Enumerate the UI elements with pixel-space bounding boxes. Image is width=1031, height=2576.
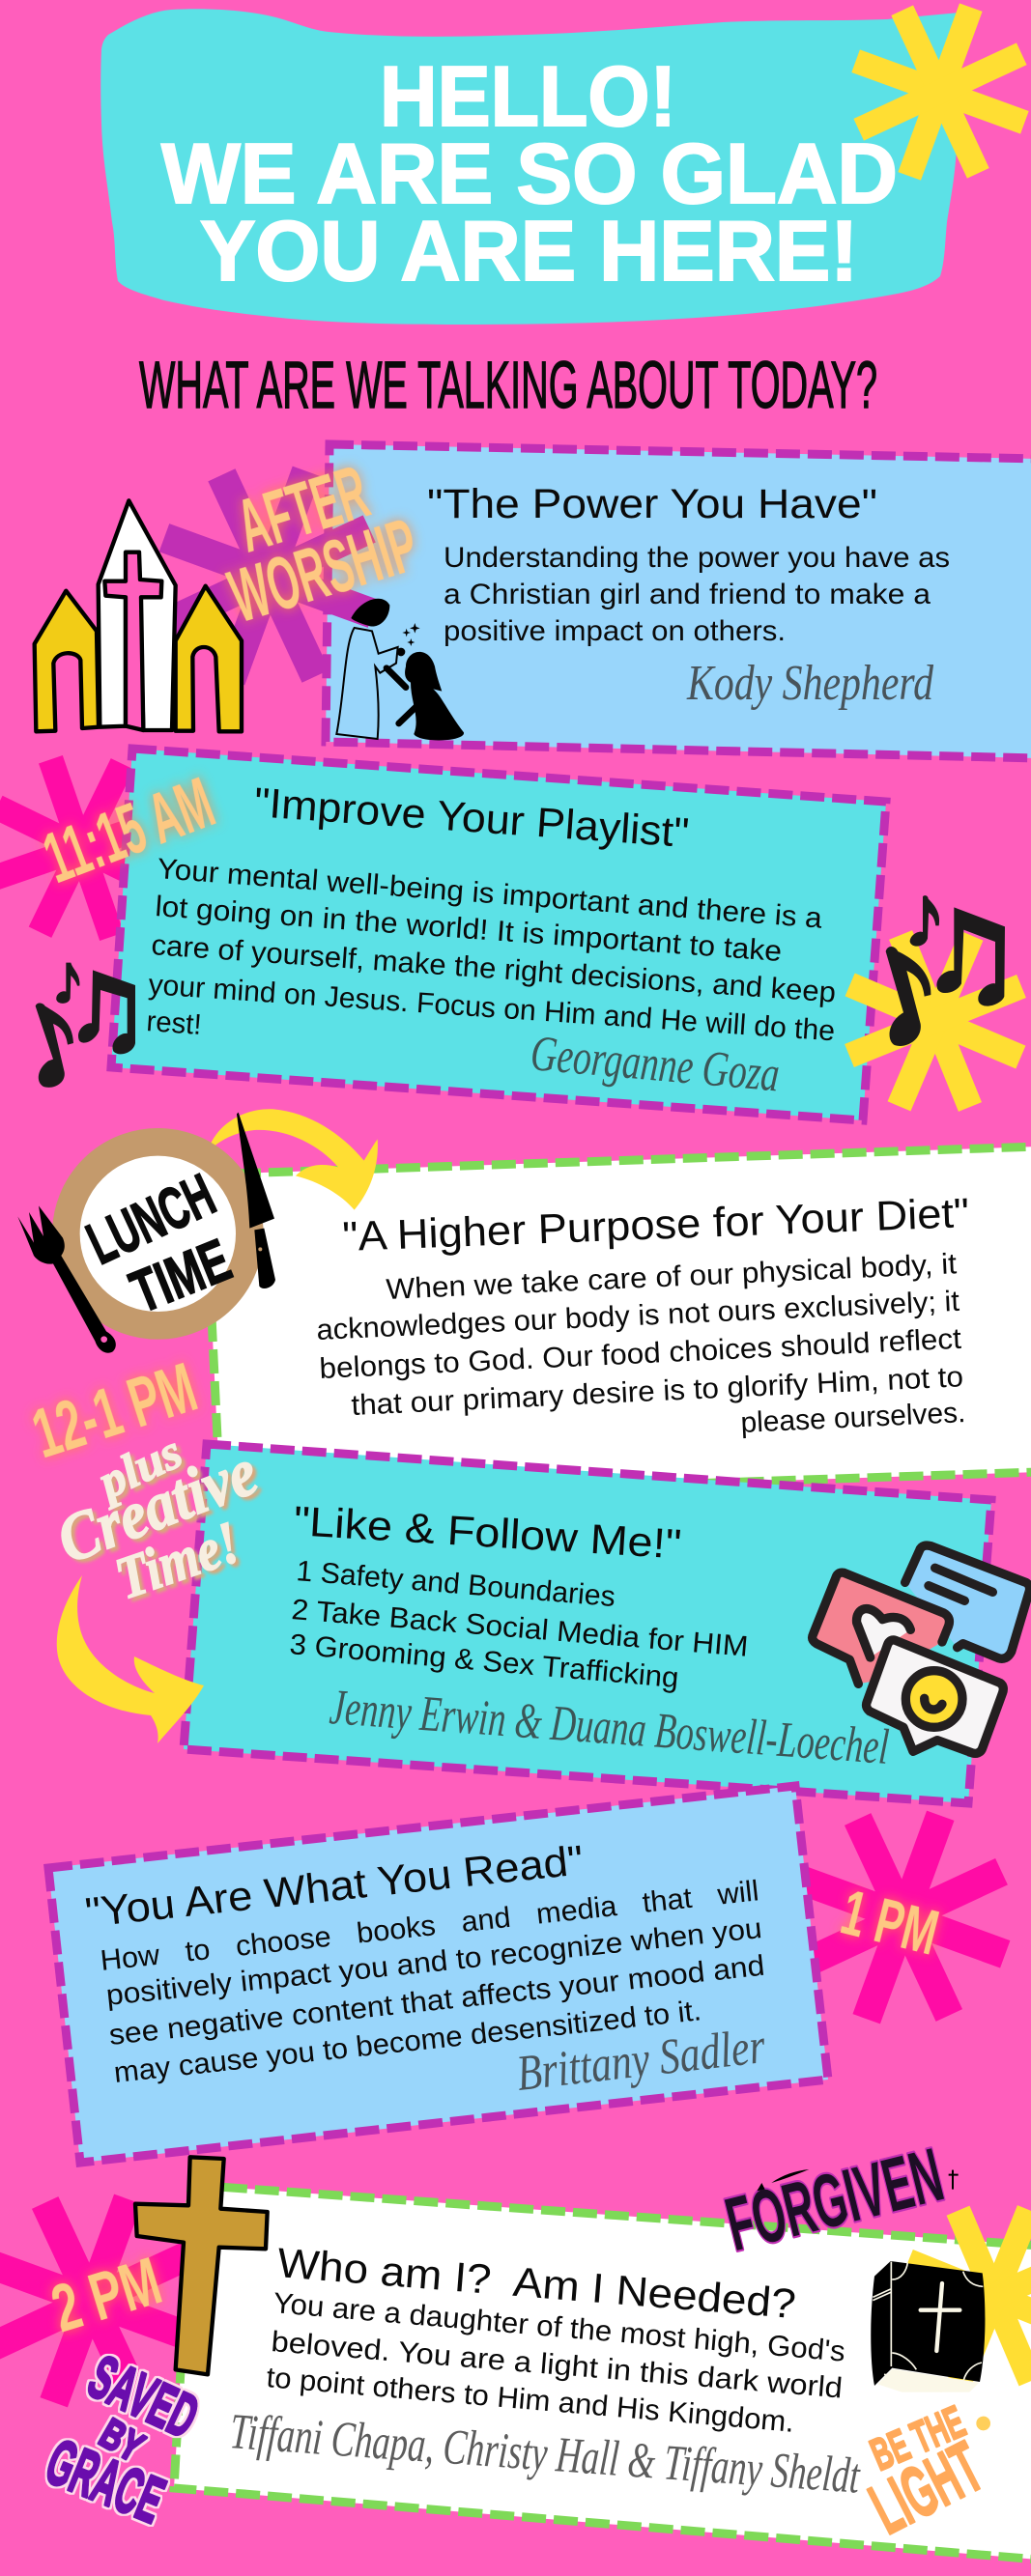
saved: SAVED xyxy=(78,2343,208,2451)
panel body: may cause you to become desensitized to it. xyxy=(112,1995,702,2089)
panel body: beloved. You are a light in this dark world xyxy=(270,2326,844,2405)
knife handle xyxy=(254,1229,275,1288)
time text: TIME xyxy=(122,1227,240,1326)
time label: 12-1 pm: 12-1 PM xyxy=(23,1348,206,1473)
panel body xyxy=(316,1248,966,1439)
panel body: How to choose books and media that will xyxy=(99,1875,760,1977)
plus: plus xyxy=(86,1424,189,1511)
title line 3: YOU ARE HERE! xyxy=(200,203,858,298)
bulb xyxy=(976,2417,990,2430)
yellow asterisk with notes xyxy=(814,899,1031,1143)
icon: wooden cross xyxy=(135,2157,268,2374)
left yellow house xyxy=(35,591,99,731)
be the: BE THE xyxy=(864,2396,972,2480)
panel body xyxy=(146,853,837,1047)
panel body: positively impact you and to recognize when you xyxy=(104,1912,763,2012)
panel body: You are a daughter of the most high, God's xyxy=(272,2287,846,2368)
panel title: "A Higher Purpose for Your Diet" xyxy=(342,1190,970,1260)
icon: jesus blessing girl xyxy=(336,599,464,740)
panel body: Your mental well-being is important and there is a xyxy=(156,853,823,935)
fork xyxy=(17,1205,116,1353)
icon: bible xyxy=(871,2261,985,2392)
double note xyxy=(936,907,1005,1006)
sticker: forgiven xyxy=(718,2132,959,2267)
smile xyxy=(925,1698,942,1710)
panel: who am i xyxy=(174,2185,1031,2560)
lunch text: LUNCH xyxy=(77,1162,225,1278)
icon: music notes right xyxy=(886,895,1005,1046)
panel body: positive impact on others. xyxy=(444,615,786,647)
grace: GRACE xyxy=(37,2426,174,2537)
magenta asterisk 2 pm xyxy=(0,2162,230,2440)
small note xyxy=(56,963,79,1004)
small note xyxy=(910,895,939,947)
sticker: be the light xyxy=(857,2396,995,2549)
blue bubble lines xyxy=(929,1568,992,1600)
panel: you are what you read xyxy=(48,1786,828,2163)
panel background xyxy=(174,2185,1031,2560)
heart xyxy=(857,1609,910,1657)
time: Time! xyxy=(107,1510,247,1612)
sparkles xyxy=(402,623,420,646)
panel title: "The Power You Have" xyxy=(427,481,877,527)
title line 1: HELLO! xyxy=(380,48,676,144)
pages xyxy=(877,2369,979,2392)
knife blade xyxy=(237,1113,274,1229)
panel title: "You Are What You Read" xyxy=(83,1837,586,1937)
icon: lunch plate xyxy=(17,1113,275,1353)
panel: the power you have xyxy=(326,444,1031,758)
panel body: please ourselves. xyxy=(740,1397,966,1439)
panel body: your mind on Jesus. Focus on Him and He will do the xyxy=(148,969,836,1047)
panel: a higher purpose for your diet xyxy=(205,1146,1031,1499)
panel body: a Christian girl and friend to make a xyxy=(444,579,931,610)
panel title: Who am I? Am I Needed? xyxy=(275,2240,797,2328)
yellow asterisk bottom right xyxy=(873,2175,1031,2417)
panel body xyxy=(444,542,950,647)
panel: like and follow me xyxy=(184,1444,991,1803)
panel body xyxy=(265,2287,846,2439)
shooting star xyxy=(757,2169,809,2191)
panel body: acknowledges our body is not ours exclusively; it xyxy=(316,1286,960,1346)
header blob xyxy=(100,9,959,325)
title line 2: WE ARE SO GLAD xyxy=(161,126,898,221)
pink cross xyxy=(104,552,161,730)
kneeling girl xyxy=(405,652,464,740)
topic list xyxy=(288,1555,750,1694)
time label: 1 pm: 1 PM xyxy=(835,1876,946,1968)
panel body: lot going on in the world! It is important to take xyxy=(154,891,783,968)
yellow asterisk top right xyxy=(825,0,1031,207)
by: BY xyxy=(92,2410,152,2472)
sticker: saved by grace xyxy=(37,2343,208,2537)
cross xyxy=(921,2283,959,2351)
pink bubble xyxy=(813,1572,949,1684)
icon: church xyxy=(35,500,242,731)
after: AFTER xyxy=(227,448,378,568)
yellow circle xyxy=(905,1671,962,1727)
small cross xyxy=(949,2170,959,2190)
magenta asterisk 11:15 xyxy=(0,722,207,974)
plate ring xyxy=(66,1142,249,1325)
knife rivets xyxy=(258,1247,262,1251)
panel body: see negative content that affects your mood and xyxy=(107,1950,766,2052)
panel body: rest! xyxy=(146,1005,203,1041)
panel body: Understanding the power you have as xyxy=(444,542,950,574)
center tower xyxy=(99,500,176,730)
creative time label xyxy=(47,1424,268,1612)
pink bubble outline xyxy=(813,1572,949,1684)
fork hole xyxy=(100,1336,107,1343)
arrow to creative panel xyxy=(57,1575,204,1743)
icon: social chat bubbles xyxy=(813,1545,1030,1753)
panel body xyxy=(99,1875,766,2089)
arrow to lunch panel xyxy=(211,1109,378,1210)
time label: 2 pm: 2 PM xyxy=(43,2243,169,2346)
panel background xyxy=(205,1146,1031,1499)
panel title: "Like & Follow Me!" xyxy=(292,1498,683,1569)
robe xyxy=(336,628,398,739)
time label: after worship xyxy=(219,448,427,638)
magenta asterisk 1 pm xyxy=(764,1778,1031,2056)
creative: Creative xyxy=(47,1434,268,1578)
panel body: care of yourself, make the right decisions, and keep xyxy=(151,929,837,1009)
panel body: to point others to Him and His Kingdom. xyxy=(265,2362,795,2439)
topic list: 2 Take Back Social Media for HIM xyxy=(290,1594,750,1663)
worship: WORSHIP xyxy=(219,501,427,638)
topic list: 3 Grooming & Sex Trafficking xyxy=(288,1628,680,1694)
panel background xyxy=(111,749,886,1120)
right yellow house xyxy=(176,586,242,731)
panel body: When we take care of our physical body, it xyxy=(386,1248,958,1306)
time label: 11:15 am: 11:15 AM xyxy=(33,762,224,898)
panel: improve your playlist xyxy=(111,749,886,1120)
blue bubble xyxy=(905,1545,1030,1658)
double note xyxy=(78,970,135,1054)
panel background xyxy=(326,444,1031,758)
panel body: that our primary desire is to glorify Him, not to xyxy=(351,1361,964,1422)
speaker name: Georganne Goza xyxy=(529,1026,782,1102)
hair xyxy=(351,599,389,627)
white bubble xyxy=(867,1640,1003,1753)
topic list: 1 Safety and Boundaries xyxy=(295,1555,616,1613)
speaker name: Kody Shepherd xyxy=(686,656,934,711)
panel background xyxy=(48,1786,828,2163)
panel body: belongs to God. Our food choices should reflect xyxy=(319,1323,962,1385)
panel background xyxy=(184,1444,991,1803)
panel title: "Improve Your Playlist" xyxy=(252,779,691,857)
icon: music notes left xyxy=(36,963,135,1088)
purple asterisk xyxy=(127,434,411,718)
single note xyxy=(36,1004,73,1088)
single note xyxy=(886,947,931,1046)
hands xyxy=(397,648,405,656)
title xyxy=(161,48,898,298)
speaker name: Brittany Sadler xyxy=(514,2019,768,2102)
book cover xyxy=(871,2261,985,2386)
arms xyxy=(387,668,416,723)
cover details xyxy=(873,2262,983,2392)
